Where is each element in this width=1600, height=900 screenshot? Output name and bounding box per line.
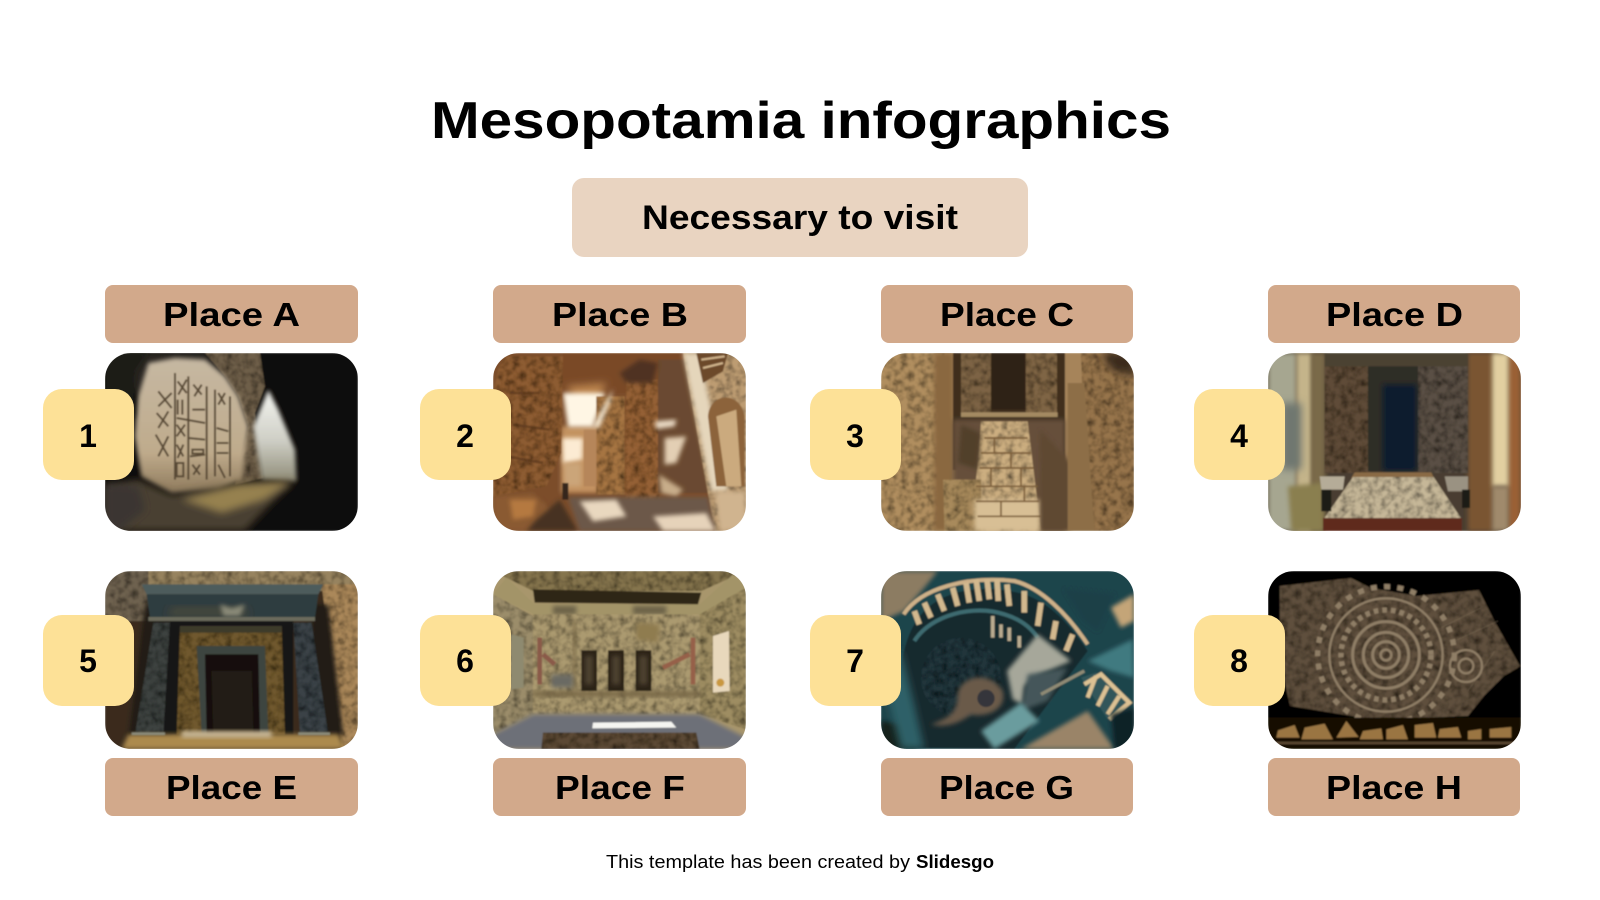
card: Place C — [810, 285, 1134, 531]
badge 4: 4 — [1230, 418, 1248, 454]
photo: excavated brick passage — [881, 353, 1134, 531]
label: Place B — [493, 285, 746, 343]
label: Place E: Place E — [166, 769, 297, 806]
label: Place B: Place B — [552, 296, 688, 333]
label: Place C: Place C — [940, 296, 1074, 333]
badge 4 — [1194, 389, 1285, 480]
subtitle box: Necessary to visit — [642, 199, 958, 237]
card: Place G — [810, 571, 1134, 816]
footer credit: Slidesgo — [916, 852, 994, 872]
card: Place D — [1194, 285, 1521, 531]
badge 8: 8 — [1230, 643, 1248, 679]
badge 1: 1 — [79, 418, 97, 454]
label: Place F — [493, 758, 746, 816]
card: Place F — [420, 571, 746, 816]
label: Place A — [105, 285, 358, 343]
label: Place H: Place H — [1326, 769, 1462, 806]
badge 7 — [810, 615, 901, 706]
badge 5 — [43, 615, 134, 706]
footer credit: This template has been created by — [606, 852, 910, 872]
label: Place A: Place A — [163, 296, 300, 333]
photo: dark carved gateway — [105, 571, 358, 749]
photo: cave with carved tablet — [105, 353, 358, 531]
label: Place D: Place D — [1326, 296, 1463, 333]
card: Place B — [420, 285, 746, 531]
label: Place C — [881, 285, 1133, 343]
label: Place G — [881, 758, 1133, 816]
label: Place F: Place F — [555, 769, 685, 806]
title: Mesopotamia infographics — [431, 92, 1171, 150]
label: Place D — [1268, 285, 1520, 343]
label: Place G: Place G — [939, 769, 1074, 806]
photo: aerial view of ancient city — [881, 571, 1134, 749]
photo: frescoed chamber — [493, 571, 746, 749]
photo: tomb chamber with stone slab — [1268, 353, 1521, 531]
badge 5: 5 — [79, 643, 97, 679]
subtitle box — [572, 178, 1028, 257]
label: Place H — [1268, 758, 1520, 816]
badge 2: 2 — [456, 418, 474, 454]
label: Place E — [105, 758, 358, 816]
badge 3 — [810, 389, 901, 480]
photo: sunlit temple columns — [493, 353, 746, 531]
photo: carved circular stone tablet — [1268, 571, 1521, 749]
badge 7: 7 — [846, 643, 864, 679]
card: Place H — [1194, 571, 1521, 816]
badge 1 — [43, 389, 134, 480]
badge 8 — [1194, 615, 1285, 706]
badge 6 — [420, 615, 511, 706]
card: Place A — [43, 285, 358, 531]
badge 3: 3 — [846, 418, 864, 454]
badge 6: 6 — [456, 643, 474, 679]
card: Place E — [43, 571, 358, 816]
badge 2 — [420, 389, 511, 480]
